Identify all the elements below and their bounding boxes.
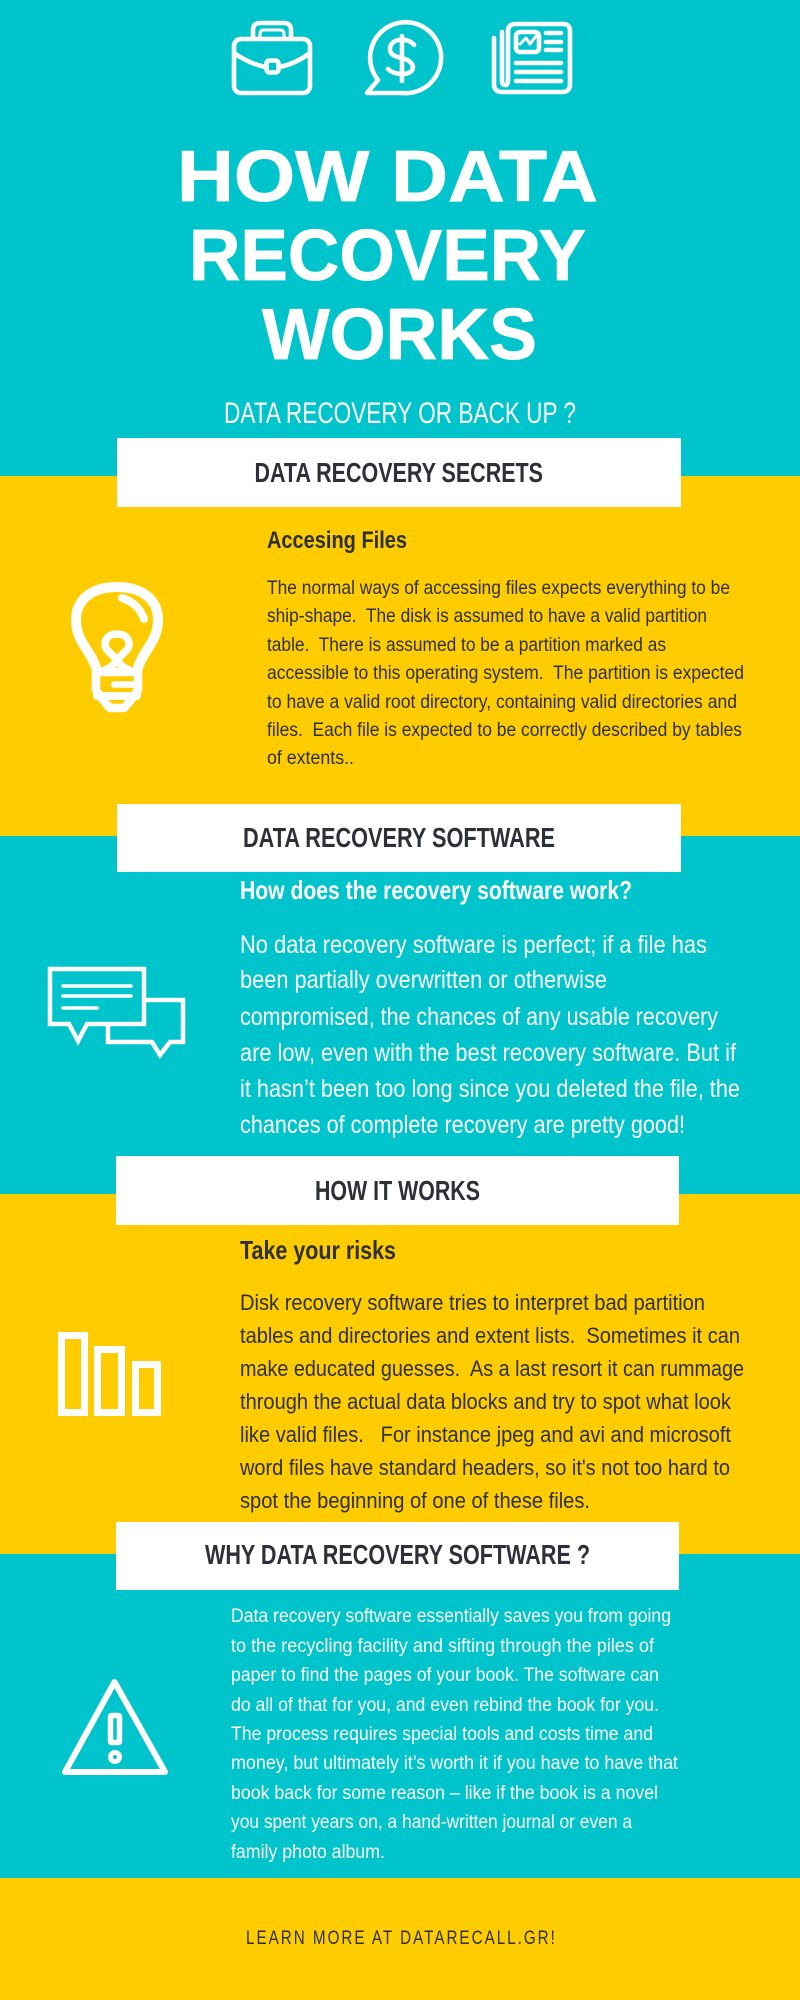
panel: footer background [0,1878,800,2000]
icon: chat bubbles [50,969,183,1055]
text block: why recovery software: paper to find the pages of your book. The software can [231,1664,659,1686]
heading: how does the recovery software work: How does the recovery software work? [240,875,632,905]
text block: accessing files: ship-shape. The disk is assumed to have a valid partition [267,605,707,627]
text block: recovery software: chances of complete recovery are pretty good! [240,1111,685,1139]
section header: data recovery secrets: DATA RECOVERY SECRETS [254,457,543,488]
icon: warning triangle [65,1682,165,1772]
title: HOW DATA [177,137,598,217]
footer call to action: LEARN MORE AT DATARECALL.GR! [246,1926,555,1948]
icon: light bulb [76,587,158,708]
text block: why recovery software: The process requires special tools and costs time and [231,1723,653,1745]
panel: accessing files background [0,476,800,836]
text block: how it works: through the actual data blocks and try to spot what look [240,1389,732,1414]
title [177,137,598,375]
text block: accessing files: to have a valid root directory, containing valid directories and [267,691,737,713]
text block: why recovery software: family photo album. [231,1841,385,1863]
text block: why recovery software: Data recovery software essentially saves you from going [231,1605,671,1627]
text block: how it works: make educated guesses. As a last resort it can rummage [240,1356,744,1381]
text block: accessing files: The normal ways of accessing files expects everything to be [267,577,730,599]
text block: accessing files: table. There is assumed to be a partition marked as [267,634,666,656]
text block: why recovery software [231,1605,679,1863]
text block: why recovery software: book back for some reason – like if the book is a novel [231,1782,658,1804]
panel: how it works background [0,1194,800,1554]
text block: why recovery software: money, but ultimately it’s worth it if you have to have that [231,1752,679,1774]
section header: data recovery software: DATA RECOVERY SOFTWARE [243,822,555,853]
text block: recovery software: are low, even with the best recovery software. But if [240,1039,736,1067]
icon: newspaper [494,24,570,92]
text block: recovery software: it hasn’t been too long since you deleted the file, the [240,1075,740,1103]
subtitle: DATA RECOVERY OR BACK UP ? [224,397,576,430]
icon: briefcase [234,23,310,93]
heading: take your risks: Take your risks [240,1235,396,1265]
heading: accesing files: Accesing Files [267,527,407,554]
text block: recovery software: been partially overwritten or otherwise [240,966,607,994]
text block: accessing files: of extents.. [267,747,354,769]
title: RECOVERY [189,216,586,296]
icon: bar chart [62,1336,158,1412]
text block: how it works: word files have standard headers, so it's not too hard to [239,1455,730,1480]
text block: how it works: like valid files. For instance jpeg and avi and microsoft [240,1422,732,1447]
text block: how it works [239,1290,744,1513]
text block: recovery software: No data recovery software is perfect; if a file has [240,931,707,959]
text block: how it works: Disk recovery software tries to interpret bad partition [240,1290,705,1315]
text block: accessing files [267,577,744,769]
text block: how it works: spot the beginning of one of these files. [240,1488,590,1513]
section header: data recovery secrets [117,438,681,507]
section header: why data recovery software: WHY DATA RECOVERY SOFTWARE ? [205,1539,590,1570]
section header: data recovery software [117,804,681,872]
text block: accessing files: files. Each file is expected to be correctly described by tables [267,719,742,741]
text block: why recovery software: you spent years on, a hand-written journal or even a [231,1811,632,1833]
text block: why recovery software: do all of that for you, and even rebind the book for you. [231,1694,659,1716]
text block: accessing files: accessible to this operating system. The partition is expected [267,662,744,684]
text block: why recovery software: to the recycling facility and sifting through the piles of [231,1635,655,1657]
section header: why data recovery software [116,1522,679,1590]
panel: hero background [0,0,800,476]
panel: recovery software background [0,836,800,1194]
section header: how it works: HOW IT WORKS [315,1175,480,1206]
title: WORKS [262,295,537,375]
panel: why recovery software background [0,1554,800,1878]
text block: recovery software [240,931,740,1139]
text block: recovery software: compromised, the chances of any usable recovery [240,1003,718,1031]
section header: how it works [116,1156,679,1225]
icon: dollar speech bubble [367,22,441,93]
text block: how it works: tables and directories and extent lists. Sometimes it can [240,1323,740,1348]
